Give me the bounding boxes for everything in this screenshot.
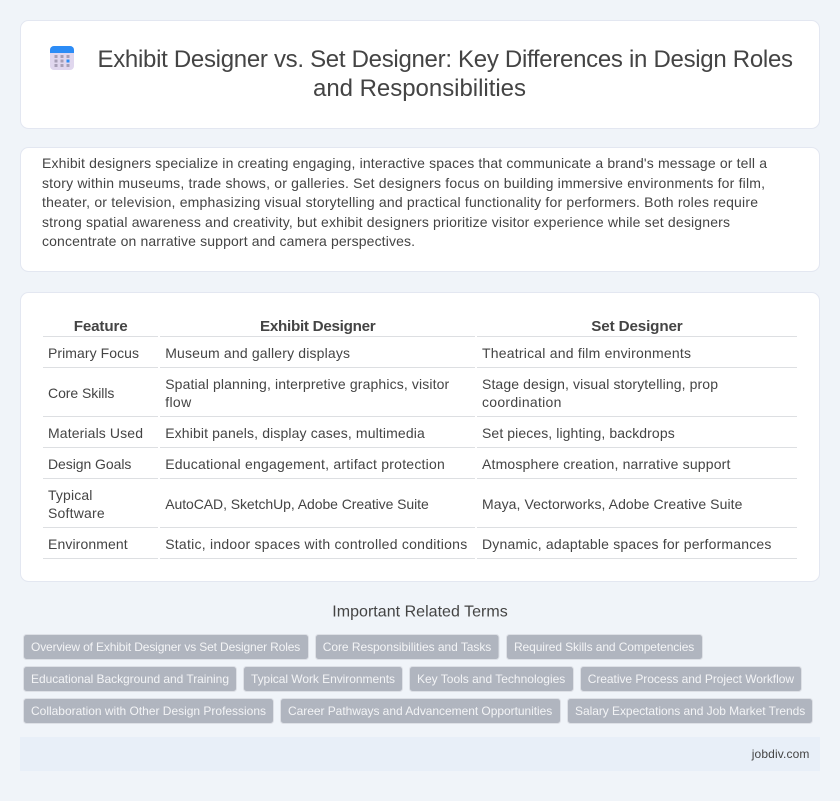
row: primary focus: Theatrical and film environments xyxy=(482,345,691,361)
intro paragraph: concentrate on narrative support and camera perspectives. xyxy=(42,233,415,249)
title xyxy=(98,46,793,102)
tag xyxy=(280,698,560,724)
row: primary focus xyxy=(48,345,691,361)
tag xyxy=(24,666,236,692)
title: and Responsibilities xyxy=(313,75,526,102)
row: core skills: coordination xyxy=(482,394,561,410)
table header: Feature xyxy=(74,318,128,335)
intro paragraph: theater, or television, emphasizing visual storytelling and practical functionality for performers. Both roles require xyxy=(42,194,758,210)
related terms tags xyxy=(24,634,812,724)
comparison table card xyxy=(20,292,820,582)
tag xyxy=(316,634,499,660)
table header: Set Designer xyxy=(591,318,683,335)
tag xyxy=(244,666,402,692)
row: environment: Environment xyxy=(48,536,128,552)
related terms heading: Important Related Terms xyxy=(332,604,508,620)
title: Exhibit Designer vs. Set Designer: Key Differences in Design Roles xyxy=(98,46,793,73)
footer site name: jobdiv.com xyxy=(751,747,809,761)
row: design goals xyxy=(48,456,731,472)
row: typical software: Typical xyxy=(48,487,92,503)
row: typical software: Maya, Vectorworks, Adobe Creative Suite xyxy=(482,496,743,512)
row: design goals: Atmosphere creation, narrative support xyxy=(482,456,731,472)
row: design goals: Educational engagement, artifact protection xyxy=(165,456,445,472)
row: materials used xyxy=(48,425,675,441)
row: environment xyxy=(48,536,771,552)
tag: Required Skills and Competencies xyxy=(514,640,694,654)
row: typical software: Software xyxy=(48,505,105,521)
row: typical software: AutoCAD, SketchUp, Adobe Creative Suite xyxy=(165,496,429,512)
row: design goals: Design Goals xyxy=(48,456,131,472)
row: materials used: Set pieces, lighting, backdrops xyxy=(482,425,675,441)
intro paragraph: Exhibit designers specialize in creating engaging, interactive spaces that communicate a brand's message or tell a xyxy=(42,155,767,171)
header card xyxy=(20,20,820,128)
row: core skills: Spatial planning, interpretive graphics, visitor xyxy=(165,376,450,392)
row: core skills: flow xyxy=(165,394,192,410)
row: environment: Static, indoor spaces with controlled conditions xyxy=(165,536,467,552)
tag xyxy=(24,634,308,660)
row: typical software xyxy=(48,487,743,521)
tag: Creative Process and Project Workflow xyxy=(588,672,794,686)
tag: Salary Expectations and Job Market Trends xyxy=(575,704,805,718)
table header xyxy=(74,318,683,335)
tag xyxy=(24,698,274,724)
footer xyxy=(20,737,820,771)
row: materials used: Exhibit panels, display cases, multimedia xyxy=(165,425,425,441)
row: environment: Dynamic, adaptable spaces for performances xyxy=(482,536,771,552)
intro paragraph: strong spatial awareness and creativity, but exhibit designers prioritize visitor experience while set designers xyxy=(42,214,730,230)
row: core skills xyxy=(48,376,718,410)
intro text card xyxy=(20,148,820,272)
row: core skills: Stage design, visual storytelling, prop xyxy=(482,376,718,392)
tag: Core Responsibilities and Tasks xyxy=(323,640,491,654)
tag xyxy=(506,634,702,660)
intro paragraph: story within museums, trade shows, or galleries. Set designers focus on building immersive environments for film, xyxy=(42,175,765,191)
tag xyxy=(410,666,574,692)
tag: Career Pathways and Advancement Opportunities xyxy=(288,704,552,718)
row: primary focus: Museum and gallery displays xyxy=(165,345,350,361)
icon: calendar xyxy=(50,46,74,70)
tag: Overview of Exhibit Designer vs Set Designer Roles xyxy=(31,640,300,654)
row: primary focus: Primary Focus xyxy=(48,345,139,361)
tag: Key Tools and Technologies xyxy=(417,672,565,686)
row: materials used: Materials Used xyxy=(48,425,143,441)
tag xyxy=(580,666,802,692)
table header: Exhibit Designer xyxy=(260,318,376,335)
intro paragraph xyxy=(42,155,767,249)
tag: Collaboration with Other Design Professions xyxy=(31,704,266,718)
tag xyxy=(568,698,812,724)
row: core skills: Core Skills xyxy=(48,385,114,401)
tag: Typical Work Environments xyxy=(251,672,395,686)
tag: Educational Background and Training xyxy=(31,672,229,686)
